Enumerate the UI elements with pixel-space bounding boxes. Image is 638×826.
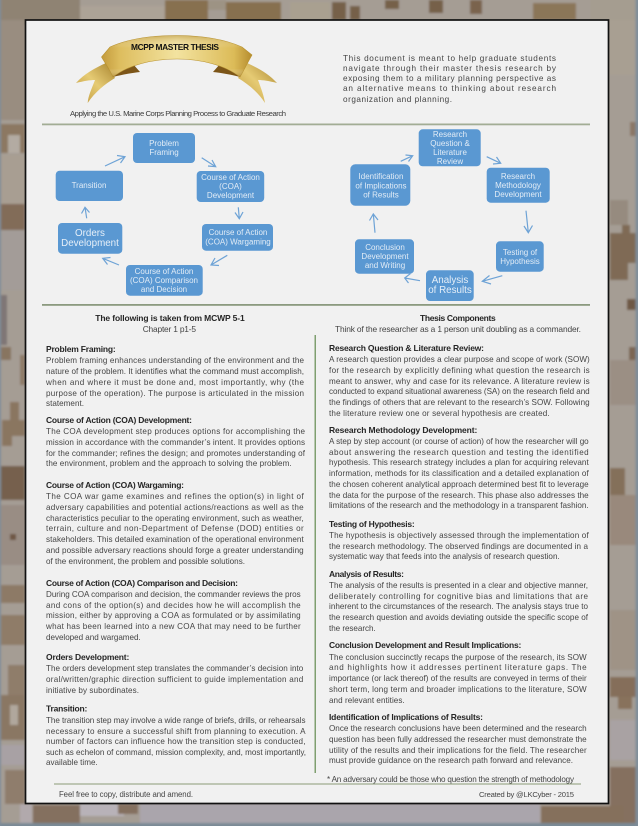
intro text block: exposing them to a military planning perspective as	[343, 74, 556, 83]
box: transition: Transition	[72, 181, 106, 190]
section: COA development: Course of Action (COA) Development:	[46, 415, 192, 425]
section: conclusion development and result implications: and relevant entities.	[329, 696, 405, 705]
section: research question and literature review: Research Question & Literature Review:	[329, 343, 484, 353]
box: identification of implications of results: of Implications	[355, 182, 407, 190]
box: conclusion development and writing: Development	[361, 252, 409, 261]
box: analysis of results: Analysis	[432, 275, 468, 286]
section: identification of implications of results: Once the research conclusions have been determined and the research	[329, 724, 587, 733]
box: research methodology development	[487, 168, 550, 203]
box: identification of implications of results: Identification	[359, 172, 403, 181]
section: identification of implications of results	[329, 712, 587, 765]
box: comparison and decision	[126, 265, 203, 296]
section: research question and literature review: conducted to expand situational awareness (SA) on the research field and	[329, 387, 590, 396]
right column heading	[335, 313, 581, 334]
section: research methodology development: about answering the research question and testing the identified	[329, 448, 589, 457]
section: transition	[46, 704, 306, 767]
section: research question and literature review: meant to answer, why and case for its relevance. A literature review is	[329, 377, 590, 386]
box: comparison and decision: (COA) Comparison	[130, 276, 198, 285]
section: testing of hypothesis	[329, 519, 589, 561]
box: conclusion development and writing: Conclusion	[365, 243, 405, 252]
section: problem framing	[45, 344, 304, 408]
section: identification of implications of results: question has been fully addressed the researcher must demonstrate the	[329, 735, 587, 744]
right column: thesis components text	[327, 313, 590, 784]
section: COA wargaming: adversary capabilities and potential actions/reactions as well as the	[46, 503, 304, 512]
section: identification of implications of results: utility of the results and their implications for the field. The researcher	[329, 746, 587, 755]
section: analysis of results: Analysis of Results:	[329, 569, 404, 579]
section: conclusion development and result implications: and highlights how it addresses pertinent literature gaps. The	[329, 663, 587, 672]
section: research methodology development: Research Methodology Development:	[329, 425, 477, 435]
section: research methodology development: A step by step account (or course of action) of how the researcher will go	[329, 437, 589, 446]
arrows	[370, 155, 532, 284]
section: transition: such as echelon of command, mission complexity, and, most importantly,	[46, 748, 306, 757]
box: research methodology development: Development	[494, 190, 542, 199]
ribbon banner with title	[76, 36, 277, 103]
section: conclusion development and result implications	[329, 640, 587, 705]
box: comparison and decision: and Decision	[141, 285, 187, 294]
section: conclusion development and result implications: short term, long term and broader implications to the literature, SOW	[329, 685, 587, 694]
section: identification of implications of results: must provide guidance on the research path forward and relevance.	[329, 756, 573, 765]
section: transition: necessary to ensure a successful shift from planning to execution. A	[46, 727, 306, 736]
section: conclusion development and result implications: importance (or lack thereof) of the results are conveyed in terms of their	[329, 674, 587, 683]
intro text block	[343, 54, 557, 104]
section: problem framing: Problem framing enhances understanding of the environment and the	[46, 356, 304, 365]
section: testing of hypothesis: The hypothesis is objectively assessed through the implementation of	[329, 531, 589, 540]
section: identification of implications of results: Identification of Implications of Results:	[329, 712, 483, 722]
section: research methodology development	[329, 425, 589, 510]
right column heading: Think of the researcher as a 1 person unit doubling as a commander.	[335, 324, 581, 334]
section: orders development	[46, 652, 304, 695]
section: conclusion development and result implications: Conclusion Development and Result Implications:	[329, 640, 521, 650]
section: problem framing: statement.	[46, 399, 84, 408]
box: identification of implications of results	[350, 164, 410, 206]
box: research question and literature review	[419, 129, 481, 166]
section: orders development: oral/written/graphic direction sufficient to guide implementation and	[46, 675, 303, 684]
section: COA comparison and decision	[45, 578, 301, 642]
section: research methodology development: the data for the purpose of the research. This phase also addresses the	[329, 491, 589, 500]
box: research question and literature review: Review	[437, 157, 463, 166]
section: analysis of results: inherent to the circumstances of the research. The analysis stays true to	[329, 602, 588, 611]
section: COA wargaming: The COA war game examines and refines the option(s) in light of	[46, 492, 304, 501]
title: MCPP MASTER THESIS	[131, 42, 219, 52]
intro text block: organization and planning.	[343, 95, 452, 104]
box: orders development	[58, 223, 122, 254]
section: COA comparison and decision: what has been learned into a new COA that may need to be further	[45, 622, 301, 631]
section: COA comparison and decision: and cons of the option(s) and decides how he will accomplish the	[46, 601, 301, 610]
box: orders development: Orders	[75, 228, 105, 239]
section: COA wargaming: of the environment, the problem and possible solutions.	[46, 557, 245, 566]
box: analysis of results: of Results	[428, 285, 472, 296]
box: testing of hypothesis: Hypothesis	[500, 257, 540, 266]
section: research methodology development: limitations of the research and the methodology in a transparent fashion.	[329, 501, 589, 510]
box: conclusion development and writing: and Writing	[365, 261, 405, 270]
box: course of action development: Course of Action	[201, 173, 260, 182]
section: orders development: initiative by subordinates.	[46, 686, 139, 695]
section: conclusion development and result implications: The conclusion succinctly recaps the purpose of the research, its SOW	[329, 653, 587, 662]
section: COA wargaming: characteristics peculiar to the operating environment, such as weather,	[46, 514, 304, 523]
box: transition	[56, 171, 123, 201]
intro text block: navigate through their master thesis research by	[343, 64, 557, 73]
section: COA wargaming: Course of Action (COA) Wargaming:	[46, 480, 184, 490]
section: COA development: mission in accordance with the commander’s intent. It provides options	[46, 438, 305, 447]
left column heading: The following is taken from MCWP 5-1	[95, 313, 245, 323]
box: problem framing: Problem	[149, 139, 179, 148]
box: research methodology development: Research	[501, 172, 535, 181]
section: COA development	[46, 415, 306, 468]
section: testing of hypothesis: the research methodology. The observed findings are documented in a	[329, 542, 588, 551]
section: COA wargaming	[46, 480, 304, 566]
section: analysis of results: The analysis of the results is presented in a clear and objective manner,	[329, 581, 588, 590]
box: research methodology development: Methodology	[495, 181, 541, 190]
section: research question and literature review	[329, 343, 590, 418]
section: transition: number of factors can influence how the transition step is conducted,	[46, 737, 306, 746]
footnote: * An adversary could be those who question the strength of methodology	[327, 775, 575, 784]
section: COA wargaming: terrain, culture and non-Department of Defense (DOD) entities or	[46, 524, 304, 533]
box: course of action wargaming: Course of Action	[209, 228, 267, 237]
right column heading: Thesis Components	[420, 313, 496, 323]
section: COA development: The COA development step produces options for accomplishing the	[46, 427, 305, 436]
section: analysis of results	[329, 569, 589, 633]
left column: MCWP 5-1 text	[45, 313, 306, 767]
section: transition: available time.	[46, 758, 98, 767]
left column heading	[95, 313, 245, 334]
section: testing of hypothesis: Testing of Hypothesis:	[329, 519, 415, 529]
section: analysis of results: deliberately controlling for cognitive bias and limitations that are	[329, 592, 588, 601]
box: course of action wargaming: (COA) Wargaming	[205, 238, 271, 246]
box: course of action wargaming	[202, 224, 273, 251]
section: orders development: The orders development step translates the commander’s decision into	[46, 664, 304, 673]
section: orders development: Orders Development:	[46, 652, 129, 662]
arrows	[82, 156, 243, 266]
box: analysis of results	[426, 270, 474, 301]
section: research question and literature review: A research question provides a clear purpose and scope of work (SOW)	[329, 355, 590, 364]
box: problem framing	[133, 133, 195, 163]
section: COA development: for the commander; refines the design; and promotes understanding of	[46, 449, 306, 458]
footer right: Created by @LKCyber - 2015	[479, 790, 574, 799]
section: transition: Transition:	[46, 704, 87, 714]
box: identification of implications of results: of Results	[363, 190, 399, 200]
section: COA wargaming: stakeholders. This detailed examination of the operational environment	[46, 535, 304, 544]
section: research question and literature review: the literature review one or several hypothesis are created.	[329, 409, 550, 418]
box: problem framing: Framing	[149, 148, 179, 157]
section: COA wargaming: and possible adversary reactions should forge a greater understanding	[46, 546, 304, 555]
right cycle diagram: thesis components	[350, 129, 550, 301]
box: orders development: Development	[61, 238, 119, 249]
section: COA comparison and decision: During COA comparison and decision, the commander reviews the pros	[46, 590, 301, 599]
box: course of action development: (COA)	[219, 182, 242, 191]
subtitle: Applying the U.S. Marine Corps Planning Process to Graduate Research	[70, 109, 286, 118]
section: COA development: the environment, problem and the approach to solving the problem.	[46, 459, 292, 468]
box: course of action development: Development	[207, 191, 255, 200]
box: testing of hypothesis	[496, 241, 544, 272]
section: analysis of results: the research question and avoids deviating outside the specific scope of	[329, 613, 589, 622]
left column heading: Chapter 1 p1-5	[143, 324, 196, 334]
footer left: Feel free to copy, distribute and amend.	[59, 790, 193, 799]
box: conclusion development and writing	[355, 239, 414, 274]
intro text block: an alternative means to thinking about research	[343, 84, 556, 93]
section: COA comparison and decision: mission, either by approving a COA as formulated or by assimilating	[46, 611, 301, 620]
section: testing of hypothesis: systematic way that feeds into the analysis of research question.	[329, 552, 560, 561]
box: research question and literature review: Research	[433, 130, 467, 139]
section: COA comparison and decision: developed and wargamed.	[46, 633, 141, 642]
section: research question and literature review: for the research by explicitly defining what question the research is	[329, 366, 590, 375]
section: analysis of results: the research.	[329, 624, 376, 633]
section: research methodology development: hypothesis. This research strategy includes a plan for acquiring relevant	[329, 458, 589, 467]
section: problem framing: Problem Framing:	[46, 344, 116, 354]
section: problem framing: nature of the problem. It identifies what the command must accomplish,	[46, 367, 304, 376]
section: COA comparison and decision: Course of Action (COA) Comparison and Decision:	[46, 578, 238, 588]
box: course of action development	[197, 171, 264, 202]
intro text block: This document is meant to help graduate students	[343, 54, 556, 63]
section: transition: The transition step may involve a wide range of briefs, drills, or rehearsals	[46, 716, 306, 725]
section: problem framing: when and where it must be done and, most importantly, why (the	[45, 378, 304, 387]
box: research question and literature review: Literature	[433, 148, 467, 157]
left cycle diagram: MCWP planning process	[56, 133, 273, 296]
box: comparison and decision: Course of Action	[135, 267, 193, 276]
box: testing of hypothesis: Testing of	[503, 248, 538, 257]
section: problem framing: purpose of the operation). The purpose is articulated in the mission	[46, 389, 304, 398]
section: research methodology development: information, methods for its classification and a detailed explanation of	[329, 469, 589, 478]
section: research question and literature review: the findings of others that are relevant to the research’s SOW. Following	[329, 398, 590, 407]
box: research question and literature review: Question &	[430, 139, 470, 148]
section: research methodology development: the chosen coherent analytical approach determined best fit to leverage	[329, 480, 589, 489]
